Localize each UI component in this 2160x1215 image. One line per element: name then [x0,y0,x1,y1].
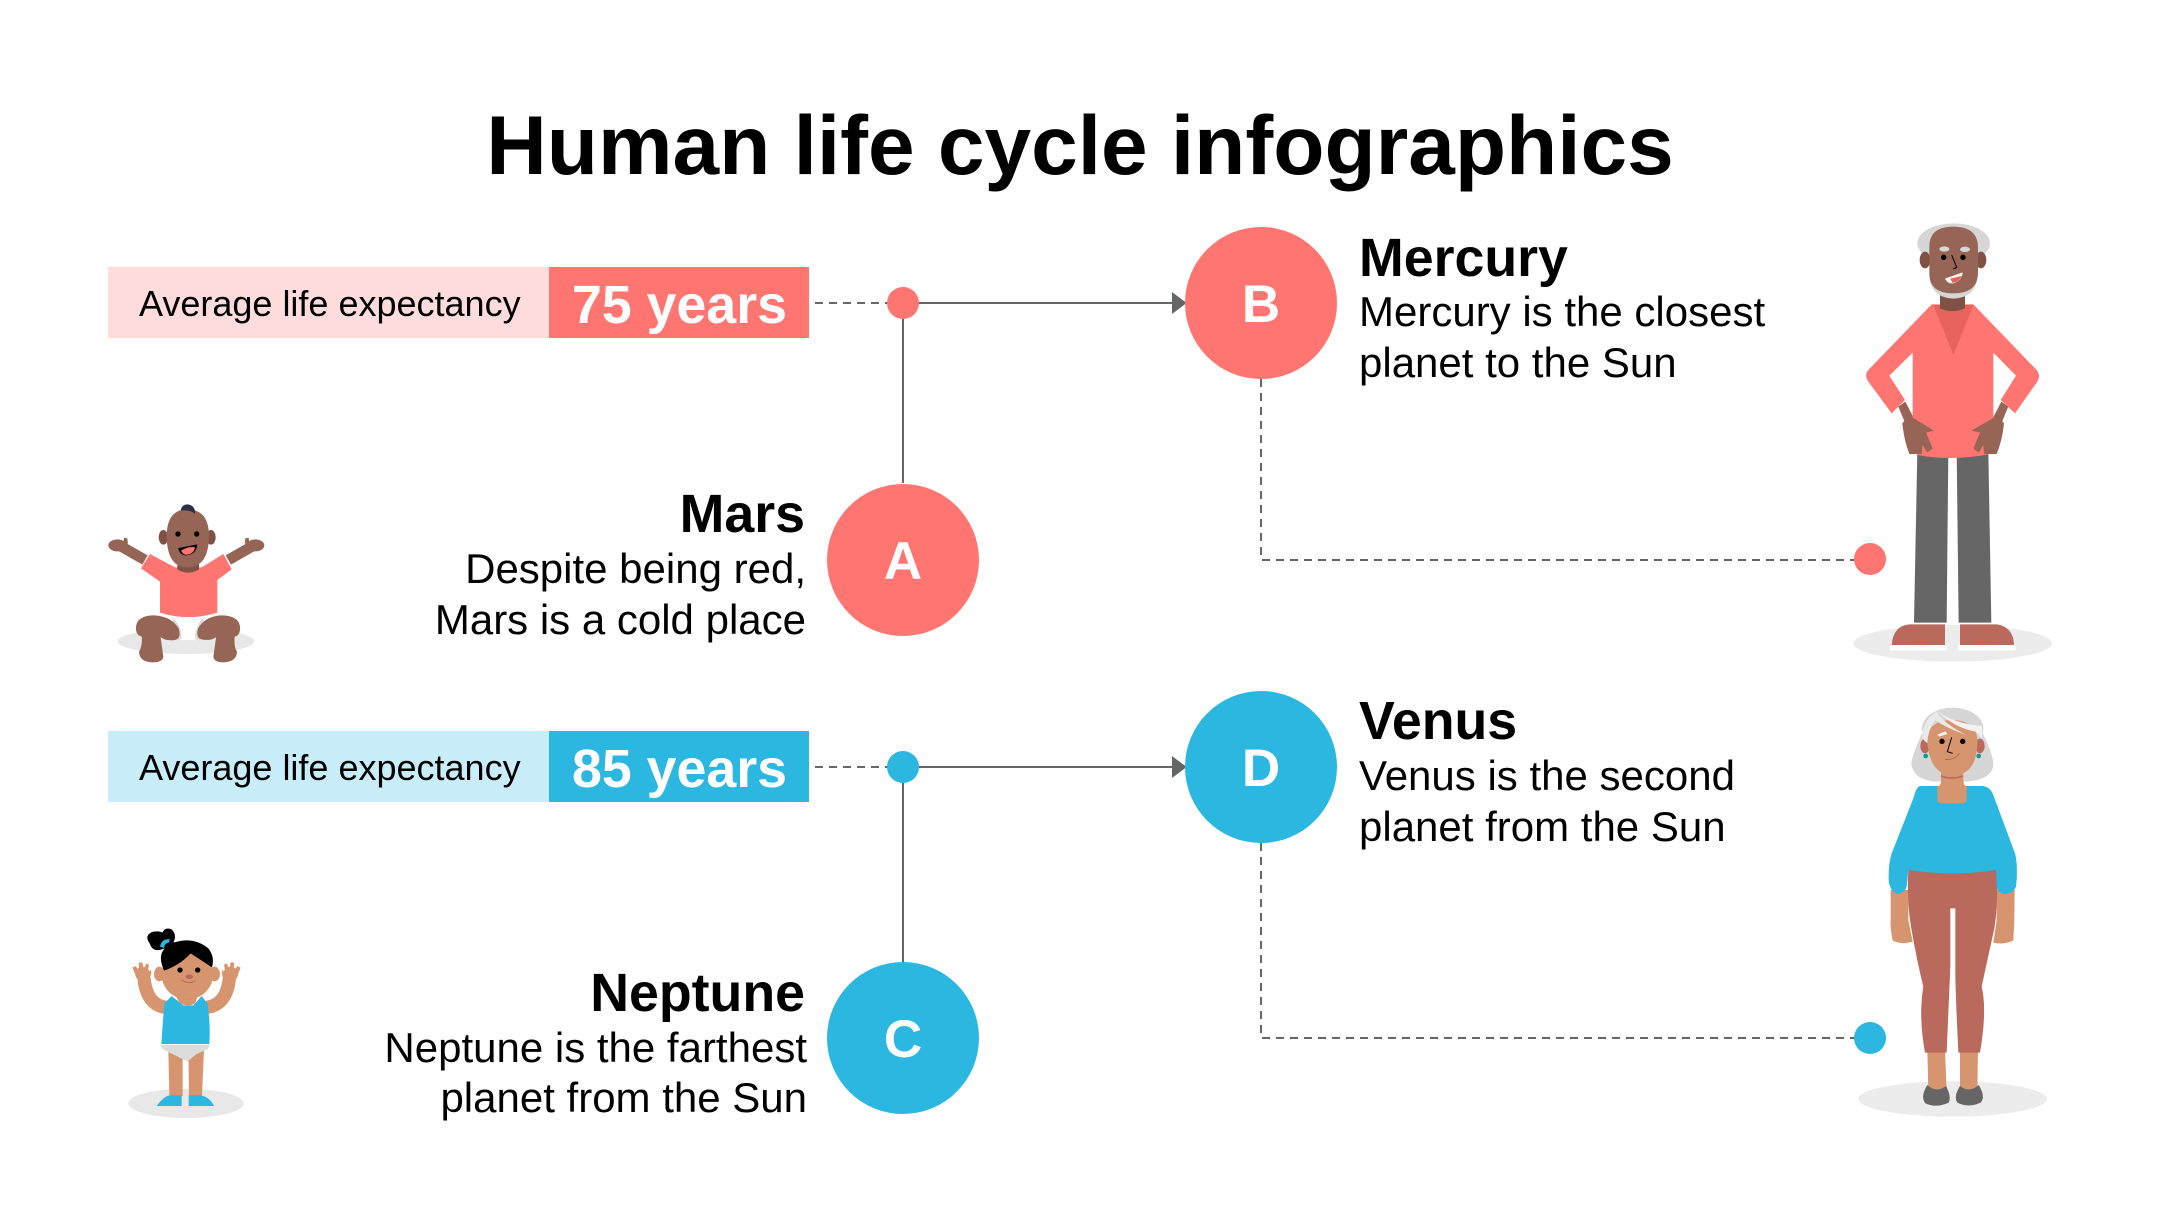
connectors: top row [815,294,1869,560]
text block: Mercury: planet to the Sun [1359,339,1677,386]
circle C [827,962,979,1114]
circle A [827,484,979,636]
text block: Venus: Venus is the second [1359,752,1735,799]
node dot: bottom right [1854,1022,1886,1054]
circle A: A [884,532,922,591]
text block: Neptune: Neptune [590,963,805,1023]
text block: Mars [435,484,806,643]
title: Human life cycle infographics [486,98,1674,192]
text block: Mercury: Mercury is the closest [1359,288,1765,335]
circle B: B [1242,275,1280,334]
circle D [1185,691,1337,843]
life expectancy bar: 75 years: 75 years [572,275,787,335]
illustration: girl [128,929,244,1118]
text block: Mercury: Mercury [1359,228,1568,288]
connectors: bottom row [815,758,1869,1038]
circle B [1185,227,1337,379]
text block: Venus: Venus [1359,691,1517,751]
life expectancy bar: 75 years [108,267,809,338]
circle C: C [884,1010,922,1069]
text block: Mercury [1359,228,1765,386]
text block: Venus [1359,691,1735,850]
text block: Venus: planet from the Sun [1359,803,1726,850]
life expectancy bar: 85 years: 85 years [572,739,787,799]
node dot: top right [1854,543,1886,575]
text block: Mars: Mars [680,484,805,544]
text block: Mars: Despite being red, [465,545,806,592]
illustration: baby [108,504,264,662]
text block: Neptune: Neptune is the farthest [384,1024,807,1071]
text block: Neptune [384,963,807,1121]
text block: Mars: Mars is a cold place [435,596,806,643]
illustration: old woman [1858,708,2047,1117]
life expectancy bar: 85 years [108,731,809,802]
text block: Neptune: planet from the Sun [440,1074,807,1121]
life expectancy bar: 85 years: Average life expectancy [139,747,521,788]
node dot: top left [887,287,919,319]
life expectancy bar: 75 years: Average life expectancy [139,283,521,324]
illustration: old man [1853,223,2052,662]
circle D: D [1242,739,1280,798]
node dot: bottom left [887,751,919,783]
